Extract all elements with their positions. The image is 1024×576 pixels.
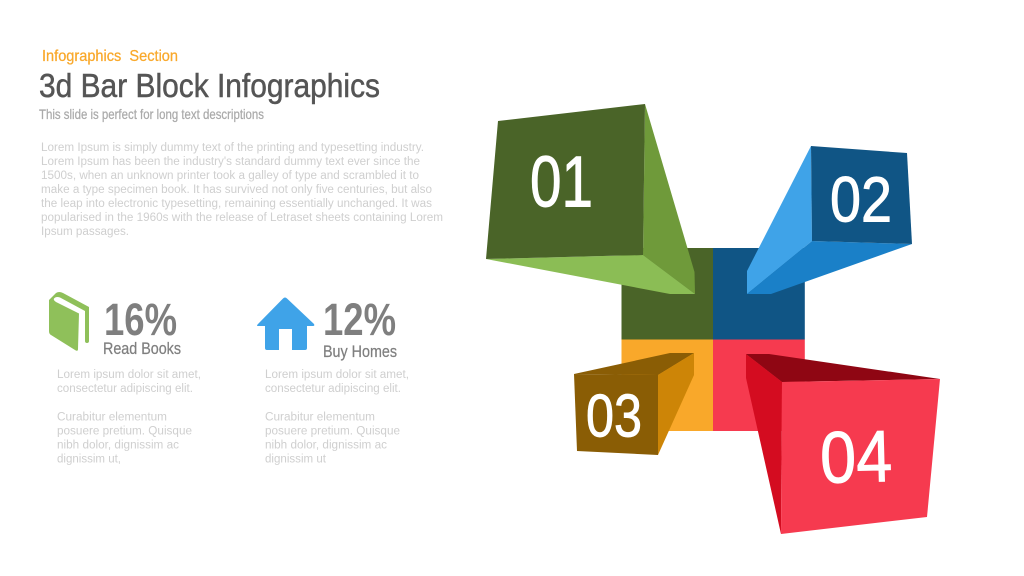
- block 03: 03: [586, 382, 642, 450]
- text: column one: nibh dolor, dignissim ac: [57, 440, 179, 452]
- block 01: [486, 104, 695, 294]
- icon: house: [257, 298, 314, 350]
- text: column two: [265, 369, 409, 466]
- block 03: [574, 353, 694, 455]
- body paragraph: Ipsum passages.: [41, 226, 129, 238]
- icon: book: [49, 292, 89, 351]
- text: column two: nibh dolor, dignissim ac: [265, 440, 387, 452]
- body paragraph: popularised in the 1960s with the release of Letraset sheets containing Lorem: [41, 212, 443, 224]
- text: column two: Lorem ipsum dolor sit amet,: [265, 369, 409, 381]
- text: column one: consectetur adipiscing elit.: [57, 383, 193, 395]
- text: column one: Curabitur elementum: [57, 412, 167, 424]
- label: Buy Homes: Buy Homes: [323, 342, 397, 361]
- body paragraph: the leap into electronic typesetting, remaining essentially unchanged. It was: [41, 198, 432, 210]
- body paragraph: 1500s, when an unknown printer took a galley of type and scrambled it to: [41, 170, 419, 182]
- text: column one: dignissim ut,: [57, 454, 121, 466]
- body paragraph: Lorem Ipsum is simply dummy text of the printing and typesetting industry.: [41, 142, 424, 154]
- title: 3d Bar Block Infographics: [39, 67, 380, 104]
- base square: [622, 248, 805, 431]
- label: Read Books: Read Books: [103, 339, 181, 358]
- section label: Infographics Section: [42, 48, 178, 65]
- text: column one: [57, 369, 201, 466]
- block 02: 02: [830, 164, 892, 236]
- body paragraph: make a type specimen book. It has survived not only five centuries, but also: [41, 184, 432, 196]
- text: column two: dignissim ut: [265, 454, 327, 466]
- body paragraph: Lorem Ipsum has been the industry's standard dummy text ever since the: [41, 156, 420, 168]
- block 04: 04: [819, 416, 893, 499]
- text: column one: posuere pretium. Quisque: [57, 426, 192, 438]
- subtitle: This slide is perfect for long text descriptions: [39, 106, 264, 122]
- block 01: 01: [530, 142, 593, 222]
- text: column one: Lorem ipsum dolor sit amet,: [57, 369, 201, 381]
- text: column two: Curabitur elementum: [265, 412, 375, 424]
- text: column two: posuere pretium. Quisque: [265, 426, 400, 438]
- block 04: [746, 354, 940, 534]
- text: column two: consectetur adipiscing elit.: [265, 383, 401, 395]
- body paragraph: [41, 142, 443, 238]
- stat: 12%: 12%: [323, 294, 396, 345]
- stat: 16%: 16%: [104, 294, 177, 345]
- block 02: [747, 146, 912, 294]
